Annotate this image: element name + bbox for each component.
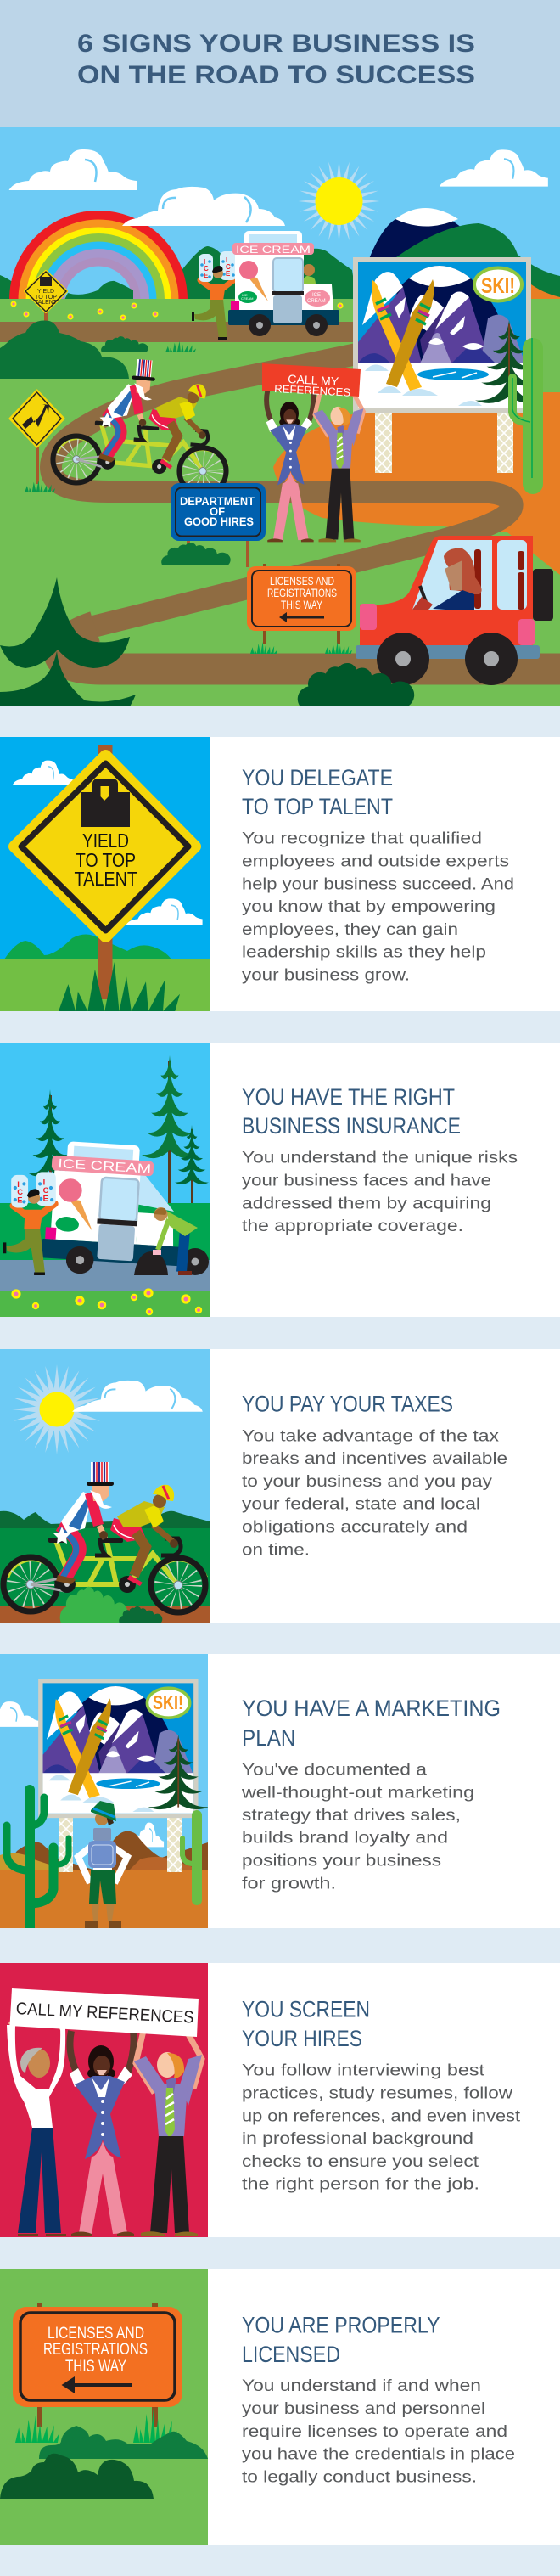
hills <box>0 1511 210 1530</box>
grass tuft <box>25 481 55 492</box>
illustration: people with sign <box>0 1963 208 2237</box>
small road sign: yield: TO TOP <box>35 295 57 301</box>
cactus <box>512 338 533 484</box>
body text <box>242 830 514 985</box>
body text: You understand the unique risks <box>242 1150 518 1167</box>
title <box>77 30 475 89</box>
heading <box>242 765 393 819</box>
hills <box>0 223 560 300</box>
body text: to your business and you pay <box>242 1473 493 1491</box>
call my references sign <box>10 1988 199 2037</box>
cactus left <box>7 1790 69 1936</box>
spare wheel <box>182 1248 209 1275</box>
orange ground <box>273 392 560 575</box>
arrow <box>61 2376 132 2393</box>
cloud <box>122 187 285 226</box>
body text: addressed them by acquiring <box>242 1195 491 1212</box>
body text: up on references, and even invest <box>242 2107 521 2125</box>
cloud <box>11 1227 104 1240</box>
dirt <box>0 1606 210 1623</box>
mechanic <box>153 1207 198 1275</box>
big pine tree <box>0 577 136 713</box>
licenses sign: THIS WAY <box>281 598 322 611</box>
hiker <box>78 1801 127 1928</box>
panel: you are properly licensed <box>0 2269 560 2545</box>
tandem bicycle riders <box>50 359 229 486</box>
small road sign: yield: TALENT <box>35 300 58 306</box>
grass tuft <box>165 341 196 352</box>
ground <box>0 299 560 706</box>
ice cream truck: CREAM <box>307 299 326 304</box>
bushes <box>0 2426 208 2499</box>
billboard: SKI! <box>153 1691 183 1713</box>
call my references sign: CALL MY <box>288 372 339 388</box>
yield diamond sign <box>14 756 195 936</box>
body text: You take advantage of the tax <box>242 1427 500 1445</box>
road <box>0 322 560 669</box>
licenses sign: REGISTRATIONS <box>43 2341 148 2359</box>
heading: YOUR HIRES <box>242 2026 362 2051</box>
pine trees <box>29 1055 209 1223</box>
title: 6 SIGNS YOUR BUSINESS IS <box>77 30 475 58</box>
woman <box>70 2031 134 2236</box>
briefcase icon <box>81 779 130 827</box>
heading: TO TOP TALENT <box>242 794 393 819</box>
yellow hill <box>0 1853 72 1872</box>
cloud <box>8 149 137 190</box>
panel: you pay your taxes <box>0 1227 560 1623</box>
panel: you have a marketing plan <box>0 1654 560 1936</box>
heading <box>242 1696 501 1751</box>
cloud <box>126 898 203 925</box>
sign posts <box>37 2303 158 2427</box>
heading <box>242 2313 440 2367</box>
cloud <box>13 761 73 785</box>
yield diamond sign: YIELD <box>82 830 129 852</box>
ground <box>0 1203 210 1260</box>
ice cream truck: ICE <box>242 293 248 297</box>
licenses sign: LICENSES AND <box>48 2325 144 2343</box>
yield diamond sign: TO TOP <box>76 849 136 871</box>
road <box>0 1260 210 1291</box>
orange hill lip <box>531 284 560 299</box>
heading: PLAN <box>242 1725 295 1751</box>
heading: LICENSED <box>242 2342 340 2367</box>
panel: you screen your hires <box>0 1963 560 2237</box>
call my references sign <box>262 363 361 399</box>
ice man: ICE <box>204 258 209 279</box>
body text <box>242 2377 515 2487</box>
licenses sign: THIS WAY <box>65 2358 126 2376</box>
ice man <box>192 251 237 340</box>
body text: your federal, state and local <box>242 1496 480 1514</box>
ice cream truck <box>228 231 339 336</box>
body text: your business and personnel <box>242 2400 485 2418</box>
call my references sign: CALL MY REFERENCES <box>15 1999 194 2028</box>
heading: YOU SCREEN <box>242 1996 370 2022</box>
illustration: licenses sign <box>0 2269 208 2545</box>
illustration: billboard and hiker <box>0 1654 209 1936</box>
body text: employees, they can gain <box>242 921 458 939</box>
licenses sign: REGISTRATIONS <box>267 586 337 599</box>
body text: leadership skills as they help <box>242 944 486 962</box>
dotted hill <box>127 1857 208 1872</box>
ice cream truck: ICE <box>312 293 321 298</box>
body text: your business faces and have <box>242 1172 491 1190</box>
body text: builds brand loyalty and <box>242 1830 448 1848</box>
ice cream truck: CREAM <box>241 296 253 301</box>
illustration: yield sign <box>0 737 210 1011</box>
sun <box>299 160 380 242</box>
people holding references sign <box>262 363 363 542</box>
heading: YOU PAY YOUR TAXES <box>242 1392 453 1417</box>
flat tire <box>134 1251 168 1275</box>
bush <box>298 663 414 706</box>
body text <box>242 1427 507 1559</box>
body text: You recognize that qualified <box>242 830 482 847</box>
billboard <box>38 1679 209 1872</box>
grass <box>59 962 180 1011</box>
bushes <box>60 1587 162 1623</box>
man with tie <box>134 2031 202 2236</box>
department of good hires sign: GOOD HIRES <box>184 515 254 528</box>
body text <box>242 1150 518 1235</box>
ground <box>0 1528 210 1606</box>
department of good hires sign <box>171 483 266 567</box>
heading: BUSINESS INSURANCE <box>242 1113 461 1139</box>
body text: strategy that drives sales, <box>242 1807 461 1825</box>
body text: You understand if and when <box>242 2377 481 2395</box>
ground <box>0 959 210 1011</box>
ice man: ICE <box>17 1180 23 1205</box>
panel: you have the right business insurance <box>0 1043 560 1317</box>
licenses sign <box>13 2307 182 2407</box>
grass strip <box>0 1291 210 1317</box>
body text: help your business succeed. And <box>242 875 514 893</box>
rainbow <box>9 211 188 300</box>
body text: the appropriate coverage. <box>242 1218 463 1235</box>
flowers <box>10 301 343 321</box>
body text: checks to ensure you select <box>242 2153 479 2171</box>
ice man: ICE <box>43 1178 49 1202</box>
licenses sign <box>247 564 356 654</box>
heading: YOU DELEGATE <box>242 765 393 790</box>
body text <box>242 2061 521 2194</box>
body text: positions your business <box>242 1853 441 1870</box>
yield diamond sign: TALENT <box>75 868 137 890</box>
body text: You've documented a <box>242 1761 428 1779</box>
heading: YOU HAVE THE RIGHT <box>242 1084 455 1110</box>
heading: YOU HAVE A MARKETING <box>242 1696 501 1721</box>
truck sign text: ICE CREAM <box>58 1156 152 1177</box>
body text: employees and outside experts <box>242 852 509 870</box>
call my references sign: REFERENCES <box>274 382 351 399</box>
cloud <box>440 149 548 187</box>
truck <box>40 1140 187 1280</box>
small road sign: yield <box>25 272 66 324</box>
cloud <box>72 1381 203 1412</box>
panel: you delegate to top talent <box>0 737 560 1011</box>
title banner <box>0 0 560 127</box>
heading <box>242 1996 370 2051</box>
billboard <box>353 257 543 473</box>
body text: to legally conduct business. <box>242 2469 477 2487</box>
body text: practices, study resumes, follow <box>242 2084 512 2102</box>
body text: require licenses to operate and <box>242 2423 507 2441</box>
desert hills <box>0 1831 208 1872</box>
body text: breaks and incentives available <box>242 1450 507 1468</box>
illustration: tandem bicycle <box>0 1227 210 1623</box>
mountain <box>370 208 460 257</box>
body text: You follow interviewing best <box>242 2061 485 2079</box>
body text: your business grow. <box>242 967 410 985</box>
bicycle <box>3 1462 205 1612</box>
body text: for growth. <box>242 1875 336 1893</box>
billboard: SKI! <box>481 274 515 298</box>
heading <box>242 1084 461 1139</box>
licenses sign: LICENSES AND <box>270 574 334 588</box>
body text: you know that by empowering <box>242 898 496 916</box>
bush <box>161 543 231 565</box>
illustration: ice cream truck with flat tire <box>0 1043 210 1317</box>
department of good hires sign: OF <box>210 504 225 518</box>
grass <box>15 2409 177 2443</box>
heading: YOU ARE PROPERLY <box>242 2313 440 2338</box>
body text: the right person for the job. <box>242 2176 479 2194</box>
ice man <box>3 1172 56 1275</box>
ice cream truck: ICE CREAM <box>236 244 311 256</box>
body text: you have the credentials in place <box>242 2446 515 2464</box>
hills <box>4 935 171 959</box>
title: ON THE ROAD TO SUCCESS <box>77 61 475 89</box>
flowers <box>11 1288 202 1315</box>
department of good hires sign: DEPARTMENT <box>180 494 255 508</box>
body text <box>241 1761 474 1893</box>
sun <box>12 1364 102 1454</box>
body text: in professional background <box>242 2130 473 2148</box>
windshield <box>136 1170 174 1212</box>
sign post <box>98 745 112 999</box>
man in white shirt <box>7 2021 66 2236</box>
cactus right <box>182 1815 197 1900</box>
cloud <box>128 1823 164 1847</box>
cloud <box>0 1701 40 1727</box>
panel: hero road scene <box>0 127 560 713</box>
small road sign: yield: YIELD <box>37 289 54 295</box>
bushes <box>0 321 148 379</box>
red car <box>356 536 553 685</box>
orange ground <box>0 1870 208 1928</box>
body text: obligations accurately and <box>242 1519 468 1537</box>
ice man: ICE <box>226 256 231 278</box>
body text: on time. <box>242 1541 310 1559</box>
zigzag road sign <box>10 391 64 484</box>
body text: well-thought-out marketing <box>241 1784 474 1802</box>
